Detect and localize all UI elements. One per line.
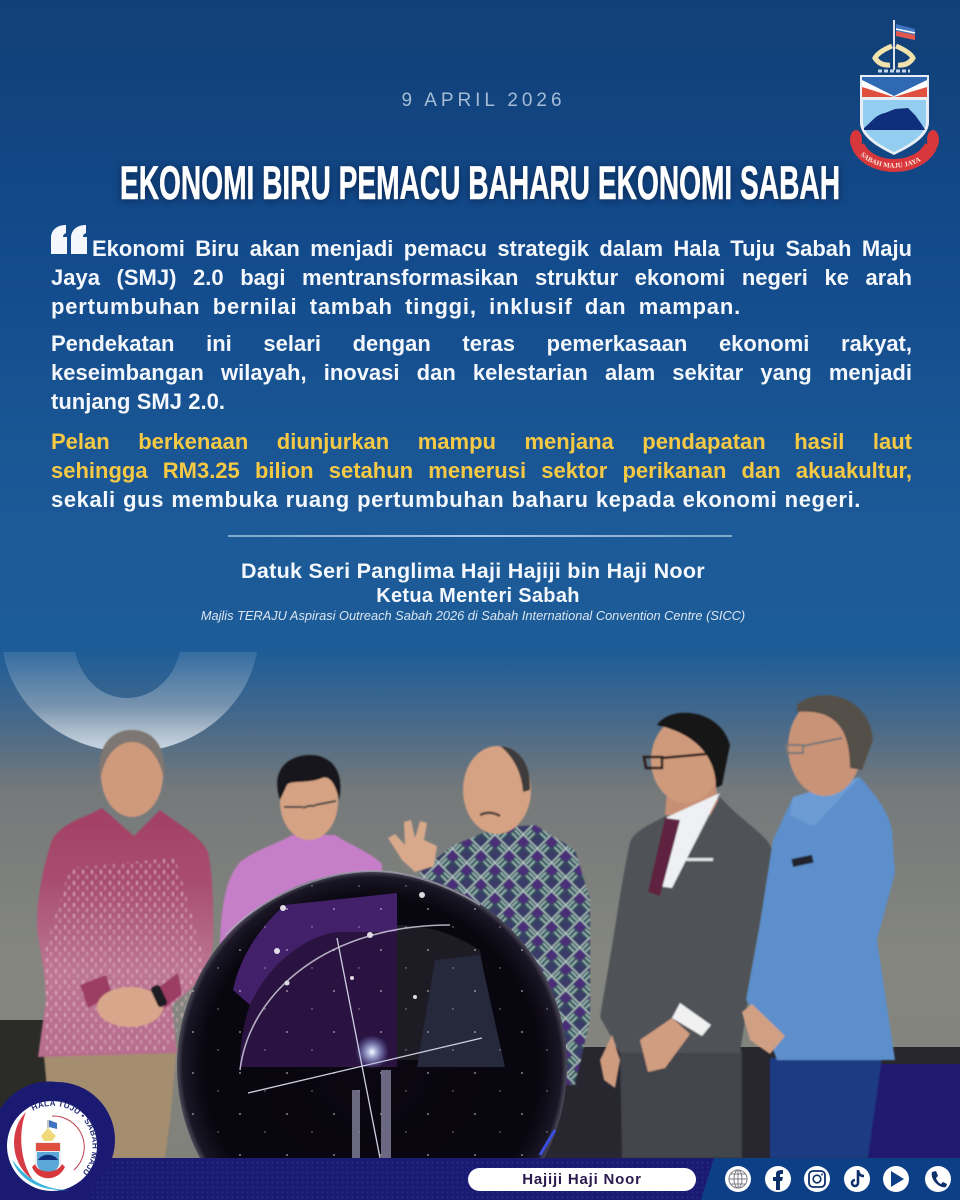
clasped hands bbox=[742, 1004, 785, 1054]
face bbox=[463, 746, 531, 834]
event note: Majlis TERAJU Aspirasi Outreach Sabah 2026 di Sabah International Convention Centre (SICC) bbox=[201, 608, 745, 623]
person 3 in batik shirt bbox=[388, 746, 590, 1085]
icon: tiktok bbox=[844, 1166, 870, 1192]
purple reflection bbox=[233, 893, 397, 1067]
paragraph 2 line 1: Pendekatan ini selari dengan teras pemerkasaan ekonomi rakyat, bbox=[51, 331, 912, 356]
ribbon with motto: SABAH MAJU JAYA bbox=[860, 152, 921, 168]
speaker role: Ketua Menteri Sabah bbox=[376, 585, 580, 607]
dotted texture bbox=[0, 1158, 714, 1200]
stage purple panel bbox=[868, 1064, 960, 1158]
icon: facebook bbox=[765, 1166, 791, 1192]
date: 9 APRIL 2026 bbox=[402, 90, 565, 111]
face bbox=[651, 717, 721, 803]
clasped hands bbox=[97, 987, 163, 1027]
white shirt bbox=[650, 793, 720, 888]
white cuff bbox=[672, 1003, 711, 1036]
shirt bbox=[220, 835, 382, 1000]
ribbon with motto bbox=[850, 130, 939, 172]
star field bbox=[192, 885, 548, 1156]
quote panel bbox=[51, 225, 912, 512]
social icons bbox=[725, 1166, 951, 1192]
bright lights bbox=[274, 892, 425, 999]
trousers bbox=[43, 1045, 177, 1158]
state crest bbox=[850, 20, 939, 172]
black glass sphere bbox=[177, 870, 567, 1158]
footer bar bbox=[0, 1158, 960, 1200]
campaign badge bbox=[0, 1082, 115, 1198]
navy footer strip bbox=[0, 1158, 960, 1200]
stage floor left bbox=[0, 1020, 60, 1158]
shirt bbox=[37, 808, 213, 1057]
small crest bbox=[32, 1120, 65, 1178]
moustache bbox=[480, 813, 500, 816]
face bbox=[101, 733, 163, 817]
divider bbox=[228, 535, 732, 537]
name pill bbox=[468, 1168, 696, 1191]
glasses bbox=[786, 738, 842, 753]
grey reflection bbox=[397, 925, 484, 1060]
person 2 in orchid shirt bbox=[220, 755, 382, 1000]
face bbox=[788, 698, 862, 796]
name tag bbox=[791, 855, 814, 867]
neck bbox=[665, 780, 720, 815]
stage floor right bbox=[540, 1047, 960, 1158]
paragraph 1 line 3: pertumbuhan bernilai tambah tinggi, inklusif dan mampan. bbox=[51, 294, 741, 319]
icon: play bbox=[883, 1166, 909, 1192]
paragraph 3 closing line: sekali gus membuka ruang pertumbuhan baharu kepada ekonomi negeri. bbox=[51, 487, 861, 512]
decorative half ring bbox=[3, 652, 257, 752]
glasses bbox=[644, 754, 706, 768]
paragraph 2 line 2: keseimbangan wilayah, inovasi dan kelestarian alam sekitar yang menjadi bbox=[51, 360, 912, 385]
paragraph 1 line 2: Jaya (SMJ) 2.0 bagi mentransformasikan struktur ekonomi negeri ke arah bbox=[51, 265, 912, 290]
crossing light beams bbox=[248, 938, 482, 1158]
batik shirt bbox=[420, 825, 590, 1085]
grey trousers bbox=[620, 1050, 742, 1158]
highlighted line 1: Pelan berkenaan diunjurkan mampu menjana pendapatan hasil laut bbox=[51, 429, 912, 454]
waving hand bbox=[388, 820, 437, 872]
hair bbox=[797, 695, 873, 770]
paragraph 1 line 1: Ekonomi Biru akan menjadi pemacu strategik dalam Hala Tuju Sabah Maju bbox=[92, 236, 912, 261]
striped tie bbox=[648, 818, 680, 896]
right hand bbox=[640, 1018, 690, 1072]
icon: phone bbox=[925, 1166, 951, 1192]
receding hair bbox=[500, 746, 530, 792]
paragraph 2 line 3: tunjang SMJ 2.0. bbox=[51, 389, 225, 414]
sphere rim highlight bbox=[225, 871, 480, 935]
darker purple zone bbox=[240, 932, 397, 1067]
name pill: Hajiji Haji Noor bbox=[522, 1171, 642, 1188]
central star glow bbox=[355, 1035, 389, 1069]
blue rim highlight bbox=[540, 1130, 555, 1155]
person 4 in grey suit bbox=[600, 713, 773, 1158]
face bbox=[280, 764, 338, 840]
speaker name: Datuk Seri Panglima Haji Hajiji bin Haji Noor bbox=[241, 559, 705, 583]
shirt sequins bbox=[44, 858, 205, 1054]
glasses bbox=[284, 801, 336, 808]
red and blue swoosh bbox=[14, 1112, 33, 1180]
highlighted line 2: sehingga RM3.25 bilion setahun menerusi sektor perikanan dan akuakultur, bbox=[51, 458, 912, 483]
cuffs bbox=[80, 973, 182, 1008]
blue social section bbox=[701, 1158, 960, 1200]
flag bbox=[894, 20, 915, 70]
watch bbox=[150, 984, 168, 1008]
shirt collar bbox=[790, 777, 860, 825]
quote mark bbox=[51, 225, 87, 254]
thin red ring bbox=[52, 1116, 84, 1170]
person 1 in maroon shirt bbox=[37, 730, 213, 1158]
arms holding flag bbox=[875, 46, 913, 65]
left hand bbox=[600, 1035, 620, 1088]
icon: instagram bbox=[804, 1166, 830, 1192]
inner arc highlight bbox=[240, 925, 450, 1070]
badge navy disc bbox=[0, 1081, 115, 1200]
grey hair bbox=[99, 730, 165, 782]
badge white disc bbox=[7, 1101, 97, 1191]
black hair bbox=[277, 755, 340, 800]
pocket square bbox=[686, 858, 713, 861]
icon: globe bbox=[725, 1166, 751, 1192]
shield bbox=[860, 75, 929, 155]
batik reflection bbox=[417, 955, 505, 1067]
light columns bbox=[352, 1070, 391, 1158]
suit jacket bbox=[600, 797, 773, 1053]
ornament beads bbox=[878, 70, 910, 72]
person 5 in blue jacket bbox=[742, 695, 895, 1158]
navy trousers bbox=[770, 1058, 882, 1158]
dark hair bbox=[657, 713, 730, 788]
sphere body bbox=[177, 871, 567, 1158]
jacket bbox=[746, 777, 895, 1060]
